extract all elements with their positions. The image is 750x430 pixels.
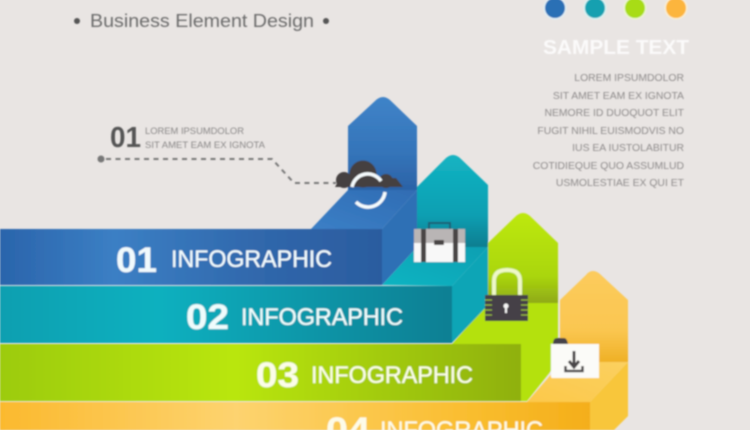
icon: padlock [485, 270, 528, 321]
subtitle: Business Element Design: Business Element Design [90, 10, 314, 31]
step 3: green arrow [0, 213, 558, 401]
label 04 [326, 411, 543, 430]
heading: SAMPLE TEXT: SAMPLE TEXT [543, 37, 689, 59]
label 01: 01 [116, 241, 157, 280]
legend colour dots [544, 0, 688, 20]
label 03: INFOGRAPHIC [311, 362, 473, 389]
label 02: INFOGRAPHIC [241, 304, 403, 331]
label 02: 02 [186, 298, 229, 337]
body text block: NEMORE ID DUOQUOT ELIT [544, 108, 685, 119]
body text block: IUS EA IUSTOLABITUR [572, 143, 684, 154]
body text block: FUGIT NIHIL EUISMODVIS NO [537, 126, 684, 137]
body text block: USMOLESTIAE EX QUI ET [556, 178, 685, 189]
callout 01 [98, 122, 336, 183]
body text block: SIT AMET EAM EX IGNOTA [553, 91, 684, 102]
icon: download folder [551, 338, 599, 378]
label 02 [186, 298, 403, 337]
body text block: COTIDIEQUE QUO ASSUMLUD [533, 161, 684, 172]
step 1: blue arrow [0, 97, 417, 285]
callout 01: LOREM IPSUMDOLOR [145, 126, 244, 137]
callout 01: 01 [110, 122, 141, 154]
label 01 [116, 241, 332, 280]
label 03: 03 [256, 356, 299, 395]
icon: cloud sync [335, 160, 403, 207]
step 2: teal arrow [0, 155, 488, 343]
body text block: LOREM IPSUMDOLOR [574, 73, 684, 84]
step 4: yellow arrow [0, 271, 628, 430]
label 01: INFOGRAPHIC [171, 246, 332, 273]
callout 01: SIT AMET EAM EX IGNOTA [145, 140, 266, 151]
label 03 [256, 356, 473, 395]
icon: briefcase [414, 223, 465, 262]
body text block [533, 73, 685, 189]
